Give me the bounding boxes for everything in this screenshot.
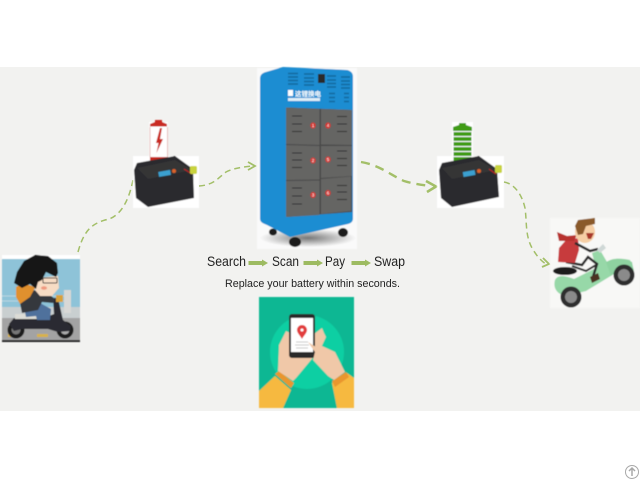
- cabinet logo: 这锂换电: [295, 89, 322, 98]
- caption: Replace your battery within seconds.: [225, 278, 400, 290]
- arrow: battery to cabinet: [199, 162, 255, 186]
- arrow: charged battery to happy rider: [504, 182, 549, 267]
- locker handles: [292, 116, 347, 204]
- steps row: Search, Scan, Pay, Swap: [207, 254, 405, 269]
- arrow: rider to battery: [78, 180, 133, 252]
- icon: battery swap cabinet: 1: [312, 123, 315, 128]
- step labels: Search: [207, 254, 246, 269]
- icon: rider on black scooter: [2, 255, 80, 342]
- icon: black car battery: [439, 156, 502, 207]
- cabinet wheels: [269, 228, 348, 247]
- cabinet vents: [288, 74, 350, 102]
- cabinet locker doors: [286, 108, 352, 217]
- icon: battery swap cabinet: [257, 67, 357, 249]
- arrow: cabinet to charged battery: [361, 162, 436, 192]
- icon: battery swap cabinet: 5: [327, 157, 330, 162]
- icon: green full battery: [452, 122, 473, 167]
- icon: hands holding phone with map pin: [259, 297, 354, 408]
- cabinet logo: [288, 89, 322, 101]
- icon: battery swap cabinet: 4: [327, 123, 330, 128]
- cabinet body: [260, 67, 353, 237]
- icon: back to top: [626, 466, 638, 478]
- step labels: Swap: [374, 254, 405, 269]
- icon: full battery above black battery: [437, 122, 504, 208]
- step arrows: [248, 260, 371, 266]
- cabinet screen: [318, 74, 325, 83]
- step labels: Pay: [325, 254, 345, 269]
- icon: battery swap cabinet: 6: [327, 190, 330, 196]
- step labels: Scan: [272, 254, 299, 269]
- icon: happy rider on green scooter: [550, 218, 640, 308]
- icon: battery swap cabinet: 2: [312, 158, 315, 163]
- icon: black car battery: [134, 156, 197, 207]
- background panel: [0, 67, 640, 411]
- icon: battery swap cabinet: 3: [312, 192, 315, 198]
- step labels: [207, 254, 405, 269]
- icon: red low battery: [149, 120, 168, 161]
- icon: low battery above black battery: [133, 120, 199, 208]
- locker numbers: [310, 122, 331, 198]
